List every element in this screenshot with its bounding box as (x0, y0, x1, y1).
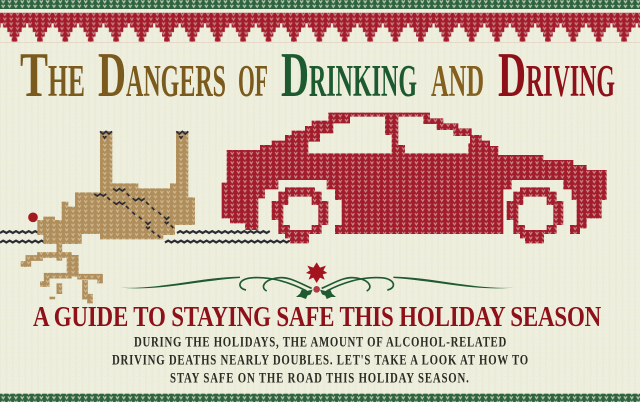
reindeer body and legs (37, 131, 195, 244)
left swash (120, 277, 312, 291)
title: D (281, 39, 309, 110)
title: HE (48, 56, 85, 106)
left wheel (272, 187, 328, 243)
title: ANGERS (126, 56, 226, 106)
car body (222, 113, 607, 234)
title: D (98, 39, 126, 110)
poinsettia (306, 262, 327, 283)
road lines (0, 231, 290, 242)
title (20, 39, 615, 110)
title: D (498, 39, 526, 110)
title: RINKING (309, 56, 417, 106)
black stitches (94, 131, 188, 238)
red nose (28, 212, 38, 222)
title: OF (238, 56, 268, 106)
title: AND (431, 56, 484, 106)
top knit border (0, 0, 640, 43)
subtitle: A GUIDE TO STAYING SAFE THIS HOLIDAY SEASON (33, 301, 602, 333)
right swash (322, 277, 513, 291)
holly leaves (296, 290, 336, 299)
bottom knit border (0, 394, 640, 402)
holly berries (313, 286, 320, 293)
hanging antlers (21, 244, 100, 303)
intro text: DRIVING DEATHS NEARLY DOUBLES. LET'S TAKE A LOOK AT HOW TO (112, 351, 528, 368)
knitted reindeer (21, 131, 195, 303)
intro text: DURING THE HOLIDAYS, THE AMOUNT OF ALCOHOL-RELATED (134, 333, 506, 350)
intro text: STAY SAFE ON THE ROAD THIS HOLIDAY SEASON. (170, 369, 469, 386)
intro text (112, 333, 528, 386)
knitted car (222, 113, 607, 243)
ornament divider (120, 262, 513, 299)
title: T (20, 39, 48, 110)
right wheel (507, 187, 563, 243)
